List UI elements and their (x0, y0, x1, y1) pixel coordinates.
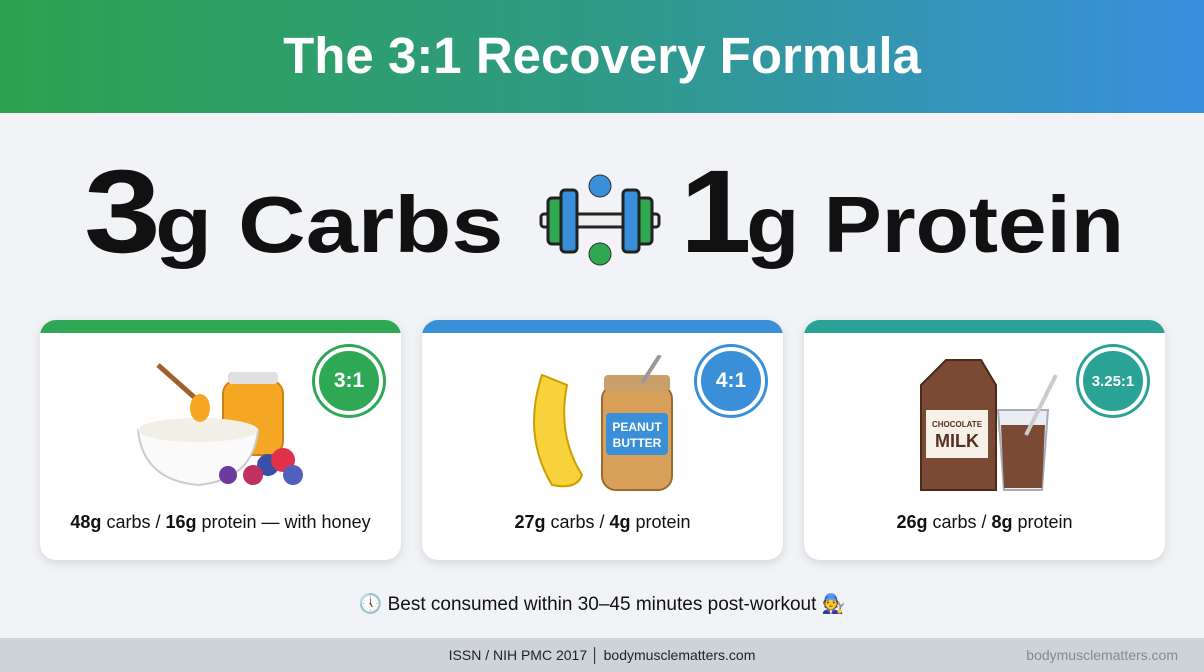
source text: ISSN / NIH PMC 2017 │ bodymusclematters.com (449, 647, 755, 663)
badge 4:1 (697, 347, 765, 415)
badge 4:1: 4:1 (716, 369, 746, 392)
caption: 26g carbs / 8g protein (896, 512, 1073, 532)
badge 3:1 (315, 347, 383, 415)
header banner (0, 0, 1204, 113)
badge 3.25:1 (1079, 347, 1147, 415)
note: timing: 🕔 Best consumed within 30–45 minutes post-workout 🧑‍🔧 (359, 594, 845, 615)
icon: banana and peanut butter jar: BUTTER (613, 436, 662, 450)
caption: 48g carbs / 16g protein — with honey (70, 512, 371, 532)
panel: chocolate milk (804, 320, 1165, 560)
title: The 3:1 Recovery Formula (283, 27, 921, 84)
ratio headline: protein: 1g Protein (680, 146, 1124, 278)
footer (0, 638, 1204, 672)
watermark: bodymusclematters.com (1026, 647, 1178, 663)
badge 3:1: 3:1 (334, 369, 364, 392)
panel: yogurt honey (40, 320, 401, 560)
icon: yogurt bowl with honey and berries (137, 363, 303, 486)
ratio headline: carbs: 3g Carbs (84, 146, 503, 278)
badge 3.25:1: 3.25:1 (1092, 372, 1134, 390)
caption: 27g carbs / 4g protein (514, 512, 691, 532)
icon: banana and peanut butter jar (533, 355, 673, 491)
icon: dumbbell ratio (540, 174, 660, 266)
icon: chocolate milk carton and glass: MILK (935, 431, 979, 451)
panel: banana peanut butter (422, 320, 783, 560)
icon: banana and peanut butter jar: PEANUT (612, 420, 662, 434)
icon: chocolate milk carton and glass (920, 359, 1058, 491)
icon: chocolate milk carton and glass: CHOCOLATE (932, 420, 983, 429)
